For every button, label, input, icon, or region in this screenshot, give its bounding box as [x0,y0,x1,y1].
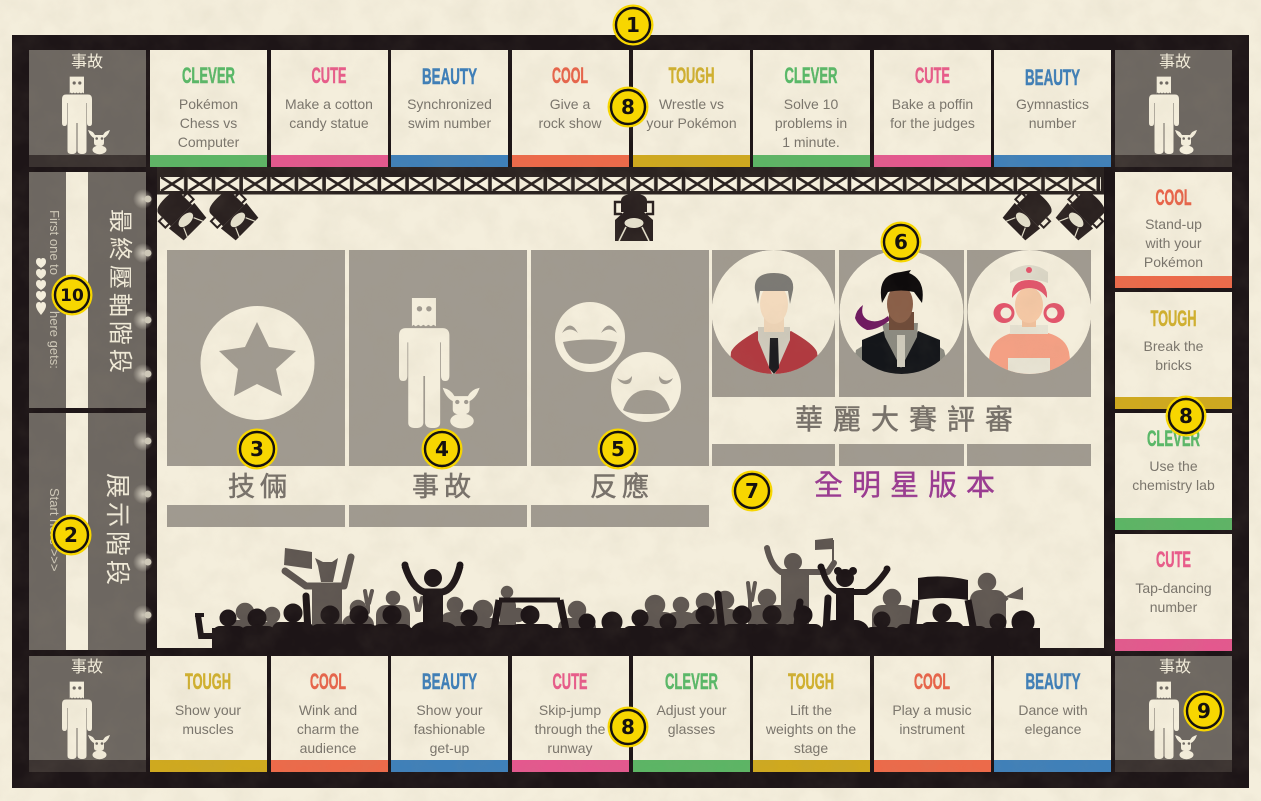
tile: beauty dance [994,656,1111,772]
tile: cute skip-jump: runway [547,740,593,756]
tile: tough wrestle: TOUGH [668,63,714,88]
badge 1: 1 [626,13,640,37]
tile: beauty dance: BEAUTY [1026,669,1081,694]
tile: beauty swim: BEAUTY [422,64,477,89]
label: skills: 技倆 [228,472,292,502]
tile: beauty get-up: BEAUTY [422,669,477,694]
judge: red suit man [712,250,836,374]
tile: tough bricks: Break the [1144,338,1203,354]
icon: happy and sad faces [555,302,681,422]
tile: beauty get-up: get-up [430,740,470,756]
tile: tough muscles: Show your [175,702,241,718]
panel: skills [167,250,345,527]
heading: final stage: 最終壓軸階段 [106,209,133,377]
tile: beauty get-up: fashionable [414,721,486,737]
panel: reactions [531,250,709,527]
tile: clever chess: Chess vs [180,115,237,131]
tile: tough bricks [1115,292,1232,409]
badge 5 [598,428,638,470]
tile: cute poffin [874,50,991,167]
badge 5: 5 [611,437,625,461]
tile: clever problems [753,50,870,167]
tile: tough muscles [150,656,267,772]
tile: cute poffin: Bake a poffin [892,96,973,112]
tile: beauty swim: swim number [408,115,491,131]
tile: clever chess [150,50,267,167]
judge: nurse joy [968,250,1092,374]
badge 8 top: 8 [621,95,635,119]
corner tile: accident bottom right: 事故 [1159,658,1191,676]
tile: cute skip-jump: CUTE [552,669,588,694]
tile: tough muscles: TOUGH [185,669,231,694]
tile: tough weights: Lift the [790,702,832,718]
tile: cool instrument: instrument [899,721,965,737]
tile: cute tap-dancing: number [1150,599,1198,615]
tile: tough wrestle [633,50,750,167]
panel: judges [712,250,1092,466]
tile: tough wrestle: Wrestle vs [659,96,724,112]
tile: beauty get-up [391,656,508,772]
corner tile: accident top left [29,50,146,167]
icon: mascot and pokemon [399,298,480,428]
tile: cool instrument: Play a music [892,702,972,718]
tile: beauty dance: Dance with [1018,702,1088,718]
badge 6: 6 [894,230,908,254]
tile: cool stand-up: with your [1144,235,1202,251]
badge 9 [1184,690,1224,732]
tile: cute skip-jump: through the [535,721,606,737]
crowd: front row [195,562,1040,650]
tile: beauty gymnastics: number [1029,115,1077,131]
right column tiles [1115,172,1232,651]
lighting truss [157,167,1104,194]
badge 7 [732,470,772,512]
crowd: back row [231,538,1023,628]
corner tile: accident top right [1115,50,1232,167]
tile: clever glasses [633,656,750,772]
panel edge bulbs [133,189,153,625]
corner tile: accident top left: 事故 [71,53,103,71]
tile: cool wink [271,656,388,772]
tile: tough weights: stage [794,740,828,756]
judge: man in vest [840,250,964,374]
label: reactions: 反應 [590,472,654,502]
badge 7: 7 [745,479,759,503]
tile: tough weights: weights on the [765,721,856,737]
tile: cool stand-up: Stand-up [1145,216,1202,232]
badge 8 bottom: 8 [621,715,635,739]
tile: cute tap-dancing [1115,534,1232,651]
tile: cool wink: Wink and [299,702,357,718]
corner tile: accident top right: 事故 [1159,53,1191,71]
tile: cute poffin: for the judges [890,115,975,131]
tile: clever chemistry: CLEVER [1147,426,1200,451]
note: first one gets hearts: here gets: [47,311,62,369]
tile: cute tap-dancing: Tap-dancing [1135,580,1212,596]
tile: cute tap-dancing: CUTE [1156,547,1191,572]
tile: tough bricks: TOUGH [1150,306,1196,331]
icon: star [200,306,314,420]
tile: clever chess: Computer [178,134,240,150]
tile: beauty dance: elegance [1025,721,1082,737]
panel: showcase stage [29,413,146,650]
label: accidents: 事故 [412,472,476,502]
tile: cute skip-jump: Skip-jump [539,702,601,718]
tile: cool wink: COOL [310,669,346,694]
tile: clever glasses: CLEVER [665,669,718,694]
tile: cool rock show: COOL [552,63,588,88]
tile: beauty gymnastics: BEAUTY [1025,65,1080,90]
tile: cool stand-up [1115,172,1232,288]
subtitle: all-star edition: 全明星版本 [814,469,1004,502]
tile: tough weights: TOUGH [788,669,834,694]
bottom row tiles [150,656,1111,772]
badge 8 bottom [608,706,648,748]
tile: clever problems: 1 minute. [782,134,840,150]
stage spotlights [150,184,1112,243]
tile: clever problems: Solve 10 [784,96,838,112]
badge 4 [422,428,462,470]
badge 6 [880,222,922,262]
tile: tough weights [753,656,870,772]
heading: showcase stage: 展示階段 [103,473,131,589]
tile: cool instrument: COOL [914,669,950,694]
badge 3: 3 [250,437,264,461]
badge 8 right [1166,396,1206,436]
tile: clever problems: CLEVER [784,63,838,88]
tile: cute poffin: CUTE [915,63,950,88]
tile: beauty gymnastics [994,50,1111,167]
badge 2: 2 [64,523,78,547]
panel: final stage [29,172,146,408]
tile: clever glasses: Adjust your [656,702,727,718]
badge 10: 10 [60,286,84,306]
tile: cool rock show: Give a [550,96,590,112]
crowd silhouette [195,538,1040,650]
tile: beauty swim [391,50,508,167]
tile: cool stand-up: COOL [1156,185,1192,210]
top row tiles [150,50,1111,167]
badge 1 [612,4,654,46]
tile: tough muscles: muscles [182,721,234,737]
corner tile: accident bottom left [29,656,146,772]
tile: tough wrestle: your Pokémon [646,115,737,131]
tile: clever glasses: glasses [668,721,715,737]
tile: clever chess: Pokémon [179,96,238,112]
badge 10 [52,274,92,316]
panel: accidents [349,250,527,527]
tile: cute statue [271,50,388,167]
badge 9: 9 [1197,699,1211,723]
corner tile: accident bottom right [1115,656,1232,772]
tile: clever chemistry [1115,413,1232,530]
tile: tough bricks: bricks [1155,357,1192,373]
tile: cool rock show: rock show [538,115,602,131]
badge 4: 4 [435,437,449,461]
tile: beauty get-up: Show your [416,702,483,718]
label: contest judges: 華麗大賽評審 [795,404,1023,435]
note: start here: Start here >>> [47,488,62,571]
badge 8 right: 8 [1179,404,1193,428]
tile: cool wink: charm the [297,721,359,737]
tile: clever chess: CLEVER [182,63,235,88]
badge 8 top [608,86,648,128]
tile: cute skip-jump [512,656,629,772]
icon: hearts [36,258,46,315]
tile: beauty swim: Synchronized [407,96,492,112]
tile: clever chemistry: Use the [1149,458,1198,474]
tile: clever chemistry: chemistry lab [1132,477,1215,493]
tile: beauty gymnastics: Gymnastics [1016,96,1089,112]
tile: cool stand-up: Pokémon [1144,254,1203,270]
tile: cute statue: candy statue [289,115,369,131]
corner tile: accident bottom left: 事故 [71,658,103,676]
note: first one gets hearts: First one to [47,210,62,275]
tile: cool instrument [874,656,991,772]
tile: cute statue: CUTE [312,63,346,88]
tile: clever problems: problems in [775,115,847,131]
tile: cute statue: Make a cotton [285,96,373,112]
stage area [150,167,1112,648]
badge 3 [236,428,278,470]
badge 2 [50,514,92,556]
tile: cool rock show [512,50,629,167]
tile: cool wink: audience [300,740,357,756]
